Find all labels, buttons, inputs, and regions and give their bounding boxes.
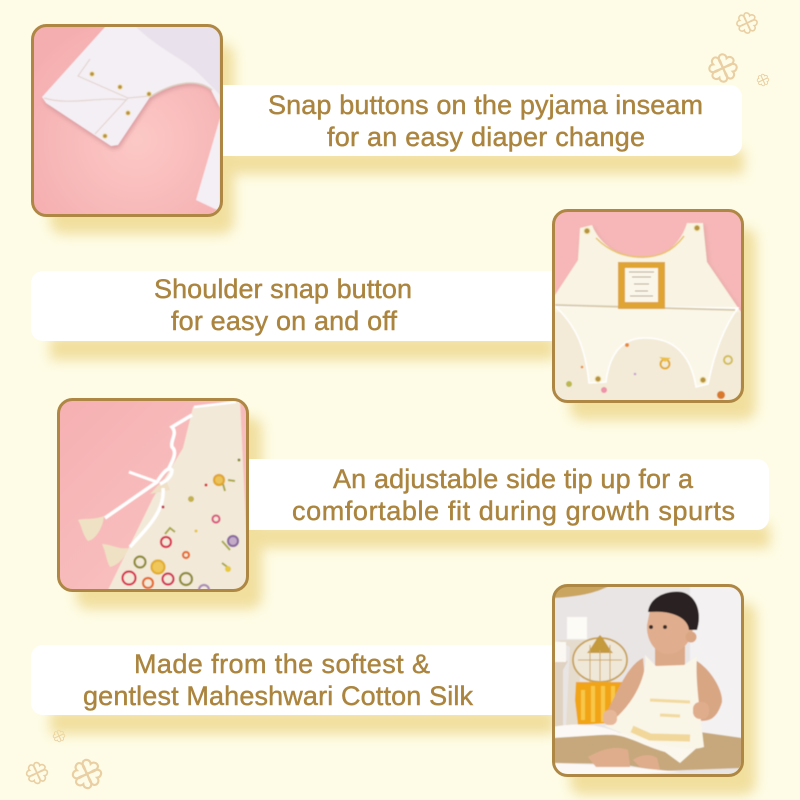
text strip 1	[222, 85, 742, 156]
text strip 4	[31, 645, 552, 715]
photo: baby in kurta	[552, 584, 744, 778]
caption 4: Made from the softest &	[134, 649, 430, 679]
caption 2: Shoulder snap button	[154, 274, 412, 304]
decorative flower: top right medium	[736, 12, 758, 34]
feature row 2: shoulder snap button	[31, 209, 756, 420]
feature row 3: adjustable side tie	[57, 398, 770, 609]
photo: pyjama inseam	[31, 24, 223, 217]
caption 2: for easy on and off	[171, 306, 397, 336]
caption 4	[83, 649, 474, 711]
decorative flower: bottom left medium	[26, 762, 48, 784]
caption 1	[268, 90, 703, 152]
caption 3: comfortable fit during growth spurts	[292, 496, 735, 526]
baby	[588, 592, 722, 770]
decorative flower: top right small	[757, 74, 769, 86]
decorative flower: bottom left large	[72, 759, 102, 789]
photo: side tie	[57, 398, 249, 595]
caption 4: gentlest Maheshwari Cotton Silk	[83, 681, 474, 711]
caption 1: Snap buttons on the pyjama inseam	[268, 90, 703, 120]
caption 3	[292, 464, 735, 526]
text strip 2	[31, 271, 552, 341]
feature row 1: pyjama snap buttons	[31, 24, 744, 234]
caption 2	[154, 274, 412, 336]
gold cage with marigolds	[573, 635, 627, 725]
candle stand	[555, 617, 587, 727]
feature row 4: Maheshwari cotton silk	[31, 584, 756, 795]
photo: garment shoulder	[552, 209, 744, 404]
text strip 3	[248, 459, 769, 530]
decorative flower: bottom left small	[53, 730, 65, 742]
caption 1: for an easy diaper change	[327, 122, 645, 152]
decorative flower: top right large	[708, 53, 738, 83]
caption 3: An adjustable side tip up for a	[333, 464, 694, 494]
